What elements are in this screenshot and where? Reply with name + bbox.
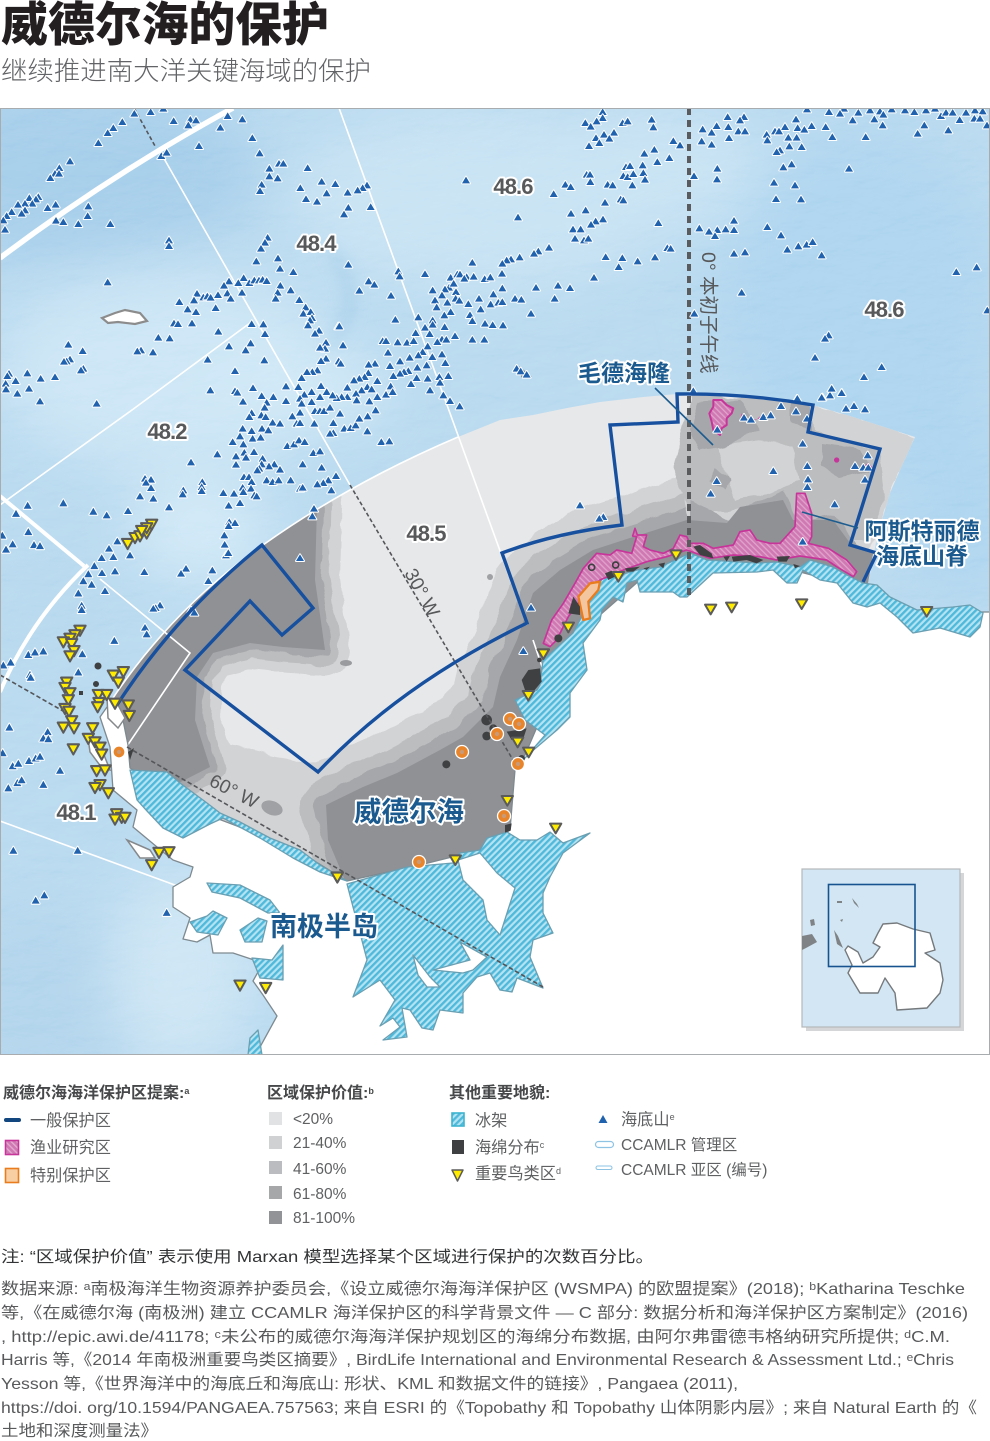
special protection sites: [113, 712, 526, 868]
inset locator map: [802, 869, 964, 1031]
60 W line: [0, 675, 543, 987]
seamounts: [2, 108, 987, 912]
place name labels: 威德尔海: [354, 796, 464, 827]
marine protected area proposal outline: [117, 394, 880, 772]
data sources: 数据来源: ᵃ南极海洋生物资源养护委员会,《设立威德尔海海洋保护区 (WSMPA) 的欧盟提案》(2018); ᵇKatharina Teschke: [1, 1280, 965, 1298]
subtitle: 继续推进南大洋关键海域的保护: [1, 56, 371, 86]
legend: other features: CCAMLR 亚区 (编号): [621, 1161, 767, 1179]
legend: protection value: 区域保护价值:: [267, 1085, 368, 1102]
prime meridian: [687, 108, 691, 597]
inset: South America and islands: [802, 898, 859, 950]
island: South Orkney: [102, 310, 147, 324]
legend: other features: d: [556, 1166, 561, 1176]
30 W line: [134, 108, 516, 765]
data sources: , http://epic.awi.de/41178; ᶜ未公布的威德尔海海洋保护规划区的海绵分布数据, 由阿尔弗雷德韦格纳研究所提供; ᵈC.M.: [1, 1328, 950, 1346]
leader line: Astrid Ridge: [802, 512, 858, 528]
legend: other features: 重要鸟类区: [475, 1165, 556, 1183]
ice shelf: Larsen: [130, 770, 347, 881]
subarea labels: 48.5: [406, 521, 446, 546]
legend: other features: c: [540, 1140, 545, 1150]
legend: proposal zones: 威德尔海海洋保护区提案:: [3, 1085, 184, 1102]
place name labels: [270, 360, 980, 942]
place name labels: 阿斯特丽德: [864, 518, 980, 544]
subarea labels: [56, 174, 904, 825]
ocean bathymetry background: [0, 80, 990, 1090]
data sources: Harris 等,《2014 年南极洲重要鸟类区摘要》, BirdLife International and Environmental Research & Assessment Ltd.; ᵉChris: [1, 1351, 954, 1369]
subarea labels: 48.6: [864, 297, 904, 322]
map border: [0, 108, 990, 1054]
data sources: Yesson 等,《世界海洋中的海底丘和海底山: 形状、KML 和数据文件的链接》, Pangaea (2011),: [1, 1375, 738, 1393]
legend: protection value: 81-100%: [293, 1210, 355, 1227]
subarea labels: 48.2: [147, 419, 187, 444]
meridian labels: 30° W: [400, 565, 443, 621]
leader line: Maud Rise: [655, 388, 713, 445]
legend: proposal zones: a: [184, 1086, 190, 1096]
legend: protection value: 61-80%: [293, 1186, 347, 1203]
legend: proposal zones: 特别保护区: [30, 1167, 111, 1185]
note: 注: “区域保护价值” 表示使用 Marxan 模型选择某个区域进行保护的次数百分比。: [1, 1248, 654, 1266]
place name labels: 毛德海隆: [578, 360, 670, 386]
seamounts: north east: [667, 108, 987, 398]
legend: other features: 冰架: [475, 1112, 507, 1130]
ice shelves: [130, 553, 983, 1055]
legend: other features: 其他重要地貌:: [449, 1083, 550, 1102]
subarea labels: 48.1: [56, 800, 96, 825]
seamounts: east shelf: [523, 388, 868, 651]
fisheries zone: small patches: [740, 414, 762, 420]
legend: proposal zones: [3, 1083, 190, 1185]
legend: protection value: 21-40%: [293, 1135, 347, 1152]
fisheries zone: Maud Rise: [709, 400, 733, 435]
map panel: [0, 80, 990, 1090]
CCAMLR boundary lines: [0, 108, 560, 888]
ice shelf: Filchner-Ronne: [347, 832, 590, 1040]
east protection value bands: [680, 394, 915, 560]
sponge distribution: [79, 545, 800, 833]
subarea labels: 48.4: [296, 231, 337, 256]
bird areas: east coast: [543, 555, 927, 654]
legend: protection value: [267, 1084, 374, 1227]
darkest zones: [107, 500, 873, 885]
data sources: 土地和深度测量法》: [1, 1422, 158, 1440]
west and south protection value bands: [180, 396, 914, 878]
data sources: 等,《在威德尔海 (南极洲) 建立 CCAMLR 海洋保护区的科学背景文件 — C 部分: 数据分析和海洋保护区方案制定》(2016): [1, 1304, 968, 1322]
legend: protection value: b: [368, 1086, 374, 1096]
inset: locator box: [828, 884, 915, 966]
legend: proposal zones: 一般保护区: [30, 1112, 111, 1130]
legend: other features: [449, 1083, 767, 1183]
seamounts: west: [2, 503, 167, 912]
meridian labels: [206, 252, 719, 813]
subarea labels: 48.6: [493, 174, 533, 199]
legend: other features: 海底山: [621, 1111, 670, 1129]
data sources: [1, 1280, 977, 1440]
meridian labels: 60° W: [206, 771, 262, 813]
data sources: https://doi. org/10.1594/PANGAEA.757563; 来自 ESRI 的《Topobathy 和 Topobathy 山体阴影内层》; 来自 Natural Earth 的《: [1, 1399, 977, 1417]
legend: protection value: 41-60%: [293, 1161, 347, 1178]
legend: other features: CCAMLR 管理区: [621, 1136, 737, 1154]
protection value zones (grey steps): [114, 394, 915, 880]
ice shelf: peninsula south: [190, 883, 283, 1055]
seamounts: northwest: [3, 108, 339, 403]
protected area: fisheries research zones: [543, 400, 872, 647]
bird areas: peninsula and Scotia: [63, 525, 337, 988]
seamounts: north centre: [333, 112, 658, 401]
seamounts: Scotia arc: [102, 406, 460, 641]
meridian labels: 0° 本初子午线: [697, 252, 719, 374]
coordinate lines: [0, 108, 689, 987]
islands near peninsula tip: [88, 368, 530, 858]
place name labels: 南极半岛: [270, 912, 378, 942]
legend: protection value: <20%: [293, 1111, 333, 1128]
place name labels: 海底山脊: [876, 543, 968, 569]
important bird areas: [63, 525, 927, 988]
fisheries zone along coast: [543, 493, 857, 647]
islands: [88, 310, 530, 858]
ice shelf: east coast: [515, 553, 983, 758]
legend: other features: e: [670, 1112, 675, 1122]
bird areas: Weddell coast: [337, 654, 556, 877]
inset: Antarctica: [845, 923, 943, 1010]
legend: proposal zones: 渔业研究区: [30, 1139, 111, 1157]
legend: other features: 海绵分布: [475, 1139, 540, 1157]
protected area: special protection zone: [578, 582, 600, 620]
land: Antarctic continent and peninsula: [100, 565, 990, 1055]
